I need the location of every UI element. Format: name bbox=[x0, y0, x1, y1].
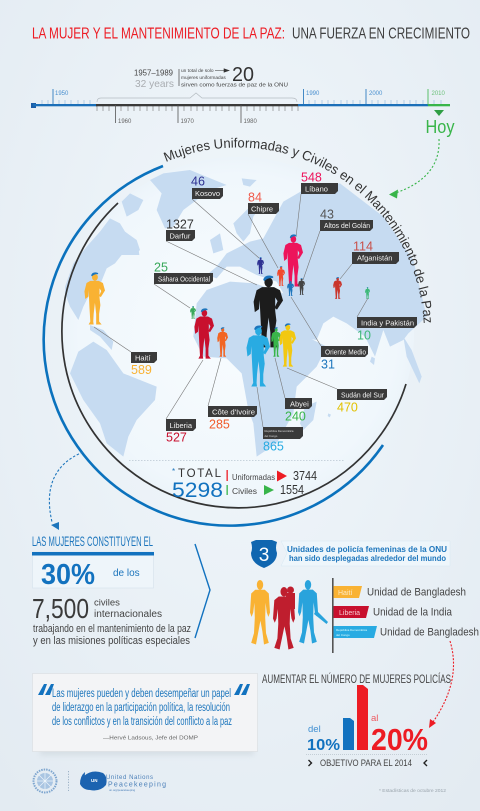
soldier: Abyei bbox=[271, 327, 281, 357]
shield badge bbox=[251, 540, 277, 568]
civilians text bbox=[32, 593, 191, 647]
label: Líbano bbox=[301, 170, 338, 194]
soldiers on map bbox=[84, 234, 370, 386]
peacekeeping logo: Peacekeeping bbox=[108, 782, 166, 788]
soldier: Darfur bbox=[254, 276, 283, 347]
label: Altos del Golán bbox=[320, 208, 373, 231]
30% box bbox=[32, 552, 154, 591]
soldier: Oriente Medio bbox=[287, 281, 294, 296]
heading: women percentage: LAS MUJERES CONSTITUYEN EL bbox=[32, 533, 153, 549]
unit: República Democrática del Congo bbox=[334, 626, 479, 638]
label: Chipre: 84 bbox=[248, 190, 262, 204]
label: Líbano: Líbano bbox=[305, 184, 328, 194]
label: Darfur: Darfur bbox=[170, 232, 191, 240]
soldier: Côte d'Ivoire bbox=[217, 327, 228, 357]
total bbox=[129, 460, 345, 502]
soldier: Chipre bbox=[277, 266, 285, 286]
peacekeeping logo bbox=[80, 772, 166, 792]
timeline: 1980 bbox=[244, 119, 258, 125]
civilians text: trabajando en el mantenimiento de la paz bbox=[33, 623, 191, 635]
soldier: Líbano bbox=[283, 234, 303, 287]
label: Liberia bbox=[166, 419, 196, 444]
soldier: Kosovo bbox=[257, 257, 264, 274]
label: Oriente Medio bbox=[321, 346, 368, 372]
peacekeeping logo: un.org/peacekeeping bbox=[109, 788, 136, 792]
timeline bbox=[31, 89, 450, 125]
label: Haití: 589 bbox=[131, 363, 152, 377]
silhouette: blue officer with rifle bbox=[298, 580, 328, 643]
unit: Haití: Haití bbox=[338, 590, 352, 597]
total: 5298 bbox=[172, 479, 223, 502]
outer blue arc bbox=[44, 166, 383, 526]
total: 3744 bbox=[293, 469, 317, 483]
bar: 20% bbox=[357, 685, 368, 750]
divider bbox=[332, 578, 334, 653]
quote box: Las mujeres pueden y deben desempeñar un papel bbox=[52, 688, 231, 700]
label: Liberia: 527 bbox=[166, 430, 187, 444]
soldier: Liberia bbox=[194, 308, 214, 359]
timeline note 1957–1989: un total de solo bbox=[181, 68, 214, 74]
peacekeeping logo: UN bbox=[91, 778, 98, 783]
soldier: Sudán del Sur bbox=[279, 323, 296, 367]
quote shadow bbox=[40, 748, 254, 755]
label: Sáhara Occidental: 25 bbox=[154, 260, 168, 274]
goal chart bbox=[306, 685, 428, 768]
label: Afganistán: Afganistán bbox=[357, 254, 392, 262]
30% box: 30% bbox=[41, 559, 95, 591]
label: Darfur bbox=[166, 218, 195, 241]
unit: Haití bbox=[334, 586, 466, 598]
timeline: 1970 bbox=[180, 119, 195, 125]
unit: Liberia bbox=[334, 606, 453, 618]
inner black arc bbox=[62, 203, 406, 508]
quote box: de los conflictos y en la transición del conflicto a la paz bbox=[52, 716, 232, 728]
label: Sáhara Occidental bbox=[154, 260, 213, 284]
today marker: Hoy bbox=[426, 117, 454, 137]
total: Civiles bbox=[232, 486, 257, 496]
total: * bbox=[172, 467, 175, 476]
total: 1554 bbox=[280, 483, 304, 497]
goal chart: 10% bbox=[307, 737, 340, 754]
goal chart: del bbox=[308, 724, 321, 735]
arrow: globe to 30% bbox=[49, 452, 83, 530]
today marker bbox=[426, 110, 454, 137]
police banner: Unidades de policía femeninas de la ONU bbox=[287, 544, 447, 554]
label: Sudán del Sur bbox=[337, 389, 387, 414]
label: India y Pakistán: 10 bbox=[357, 328, 371, 342]
title: LA MUJER Y EL MANTENIMIENTO DE LA PAZ: bbox=[32, 26, 285, 42]
label: Côte d'Ivoire bbox=[208, 406, 257, 432]
goal chart: 20% bbox=[371, 722, 428, 757]
label: Oriente Medio: Oriente Medio bbox=[325, 348, 366, 356]
arrow: today to globe bbox=[389, 139, 439, 198]
label: Liberia: Liberia bbox=[170, 421, 193, 430]
goal chart: al bbox=[371, 713, 378, 724]
label: Altos del Golán: Altos del Golán bbox=[324, 221, 370, 230]
label: Chipre bbox=[248, 190, 279, 214]
label: Afganistán: 114 bbox=[353, 240, 373, 254]
label: Sáhara Occidental: Sáhara Occidental bbox=[158, 274, 210, 284]
label: Sudán del Sur: Sudán del Sur bbox=[341, 390, 384, 400]
soldier: República Democrática del Congo bbox=[246, 325, 270, 386]
soldier: Afganistán bbox=[333, 277, 342, 299]
label: República Democrática del Congo: 865 bbox=[263, 440, 284, 454]
unit: República Democrática del Congo: del Congo bbox=[336, 633, 350, 637]
label: Haití: Haití bbox=[135, 354, 151, 362]
timeline note 1957–1989 bbox=[134, 64, 288, 90]
label: Sudán del Sur: 470 bbox=[337, 400, 358, 414]
civilians text: civiles bbox=[94, 598, 120, 608]
footnote: * Estadísticas de octubre 2012 bbox=[379, 788, 446, 794]
label: Chipre: Chipre bbox=[251, 204, 273, 214]
timeline: 1960 bbox=[118, 119, 132, 125]
bar: 10% bbox=[343, 718, 354, 750]
civilians text: 7,500 bbox=[32, 593, 89, 624]
label: República Democrática del Congo: del Congo bbox=[264, 434, 278, 438]
unit: Liberia: Liberia bbox=[339, 610, 360, 617]
timeline: 2000 bbox=[369, 91, 383, 97]
dotted separator bbox=[68, 771, 70, 791]
globe map bbox=[62, 157, 427, 509]
UN emblem bbox=[34, 770, 56, 792]
unit: República Democrática del Congo: República Democrática bbox=[336, 628, 367, 632]
timeline note 1957–1989: sirven como fuerzas de paz de la ONU bbox=[181, 82, 288, 88]
label: India y Pakistán: India y Pakistán bbox=[361, 318, 414, 328]
arrow: units to goal bbox=[429, 641, 454, 728]
civilians text: internacionales bbox=[94, 609, 162, 620]
curved heading: Mujeres Uniformadas y Civiles en el Mantenimiento de la Paz bbox=[164, 138, 432, 323]
timeline note 1957–1989: mujeres uniformadas bbox=[181, 75, 226, 81]
silhouette: yellow officer bbox=[250, 580, 270, 644]
soldier: Sáhara Occidental bbox=[190, 306, 196, 319]
quote box: —Hervé Ladsous, Jefe del DOMP bbox=[103, 736, 198, 742]
label: Altos del Golán: 43 bbox=[320, 208, 334, 222]
label: Haití bbox=[131, 352, 157, 377]
label: República Democrática del Congo bbox=[263, 427, 303, 454]
unit list bbox=[334, 586, 479, 638]
quote box bbox=[32, 674, 258, 752]
label: Kosovo: 46 bbox=[191, 174, 205, 188]
label: Darfur: 1327 bbox=[166, 218, 194, 232]
police banner bbox=[281, 541, 450, 566]
police silhouettes bbox=[250, 580, 328, 649]
label: Kosovo: Kosovo bbox=[195, 189, 220, 198]
unit: Liberia: Unidad de la India bbox=[373, 606, 453, 618]
land masses bbox=[65, 170, 427, 457]
soldier: India y Pakistán bbox=[365, 287, 370, 299]
chevron bbox=[195, 544, 210, 638]
label: Líbano: 548 bbox=[301, 170, 322, 184]
label: Afganistán bbox=[352, 240, 399, 264]
police banner: han sido desplegadas alrededor del mundo bbox=[289, 553, 446, 563]
label: Côte d'Ivoire: Côte d'Ivoire bbox=[212, 408, 255, 416]
timeline: 2010 bbox=[432, 91, 446, 97]
unit: Haití: Unidad de Bangladesh bbox=[367, 586, 466, 598]
quote box: de liderazgo en la participación política, la resolución bbox=[52, 702, 230, 714]
total: Uniformadas bbox=[232, 472, 275, 482]
peacekeeping logo: United Nations bbox=[106, 775, 153, 781]
label: Oriente Medio: 31 bbox=[321, 358, 335, 372]
label: India y Pakistán bbox=[357, 317, 417, 342]
timeline: 1990 bbox=[306, 91, 320, 97]
label: Abyei: Abyei bbox=[290, 400, 309, 408]
soldier: Altos del Golán bbox=[298, 278, 305, 295]
goal chart: OBJETIVO PARA EL 2014 bbox=[320, 758, 412, 768]
soldier: Haití bbox=[84, 272, 105, 325]
label: Côte d'Ivoire: 285 bbox=[209, 418, 230, 432]
timeline note 1957–1989: 32 years bbox=[135, 78, 174, 90]
leader lines bbox=[94, 194, 368, 427]
total: TOTAL bbox=[178, 468, 222, 480]
label: Abyei bbox=[285, 398, 312, 424]
label: República Democrática del Congo: República Democrática bbox=[264, 429, 294, 433]
30% box: de los bbox=[113, 568, 140, 579]
label: Abyei: 240 bbox=[285, 410, 306, 424]
timeline note 1957–1989: 20 bbox=[232, 64, 254, 86]
timeline note 1957–1989: 1957–1989 bbox=[134, 68, 174, 78]
silhouette: red officer with child bbox=[273, 586, 295, 649]
shield badge: 3 bbox=[259, 545, 269, 566]
civilians text: y en las misiones políticas especiales bbox=[33, 635, 190, 647]
timeline: 1950 bbox=[55, 91, 69, 97]
label: Kosovo bbox=[191, 174, 223, 199]
